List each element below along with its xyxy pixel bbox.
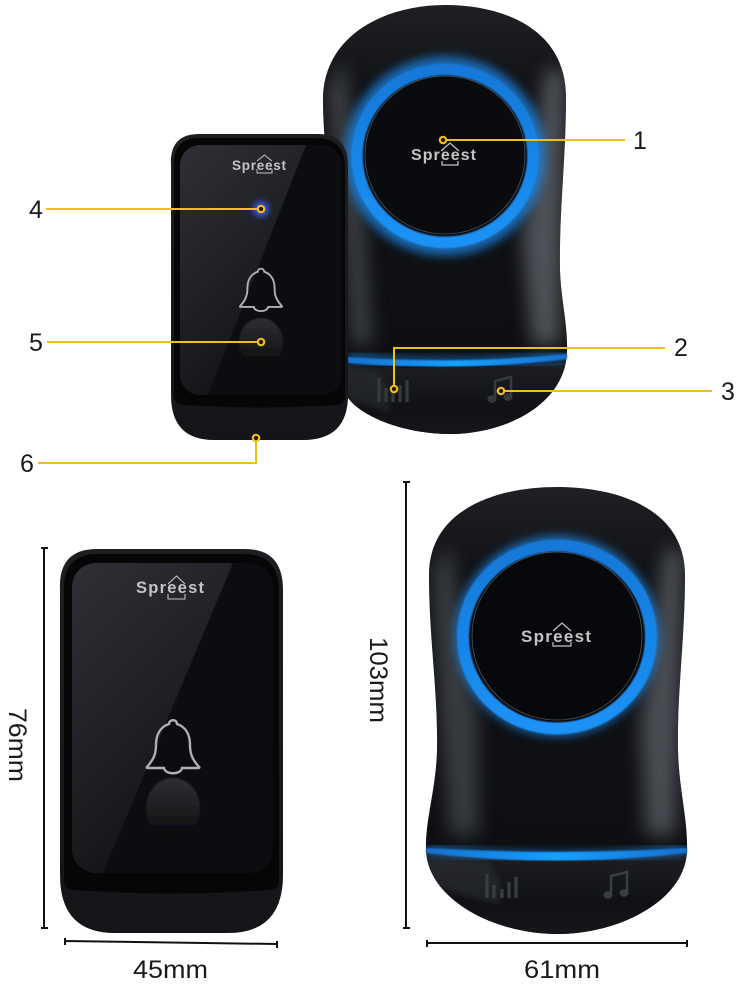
- dimension: 61mm: 61mm: [524, 956, 600, 984]
- blue light bar: [347, 354, 567, 367]
- dimension: 103mm: 103mm: [364, 637, 392, 723]
- receiver unit, top: [323, 5, 570, 440]
- blue light bar: [426, 848, 687, 860]
- music note icon: [489, 377, 511, 401]
- callout 2: [391, 334, 688, 392]
- logo: Spreest: [521, 627, 591, 646]
- receiver unit, bottom: [420, 487, 695, 940]
- dimension: 76mm: 76mm: [3, 708, 31, 782]
- callout 5: [29, 329, 264, 357]
- callout 1: [440, 127, 647, 155]
- callout 4: 4: [29, 196, 43, 224]
- push button: [146, 778, 200, 838]
- logo: Spreest: [232, 158, 286, 173]
- dimension: 103mm: [364, 482, 410, 928]
- callout 1: 1: [633, 127, 647, 155]
- callout 2: 2: [674, 334, 688, 362]
- callout 5: 5: [29, 329, 43, 357]
- face plate: [72, 563, 273, 873]
- receiver body: [426, 487, 687, 934]
- push button: [239, 318, 283, 366]
- receiver body: [323, 5, 567, 434]
- bell icon: [240, 269, 282, 311]
- shadow band: [64, 554, 279, 894]
- logo: Spreest: [136, 579, 204, 597]
- LED: [253, 201, 269, 217]
- dimension: 61mm: [427, 940, 687, 984]
- callout 4: [29, 196, 264, 224]
- gloss: [180, 145, 306, 395]
- shadow band: [174, 138, 345, 408]
- button body: [60, 549, 283, 933]
- dimension: 45mm: [65, 938, 277, 984]
- dimension: 76mm: [3, 548, 48, 928]
- music note icon: [605, 872, 627, 897]
- bell icon: [147, 720, 199, 773]
- volume icon: [487, 874, 516, 898]
- doorbell button unit, bottom: [60, 549, 283, 933]
- callout 3: [498, 378, 735, 406]
- gloss: [72, 563, 233, 873]
- glowing ring: [357, 70, 533, 242]
- logo: Spreest: [411, 147, 477, 164]
- glowing ring: [463, 546, 651, 728]
- callout 6: 6: [20, 450, 34, 478]
- dimension: 45mm: 45mm: [133, 956, 208, 984]
- face plate: [180, 145, 342, 395]
- button body: [171, 134, 348, 440]
- callout 6: [20, 435, 259, 478]
- doorbell button unit, top: [171, 134, 348, 440]
- callout 3: 3: [721, 378, 735, 406]
- volume icon: [379, 378, 407, 402]
